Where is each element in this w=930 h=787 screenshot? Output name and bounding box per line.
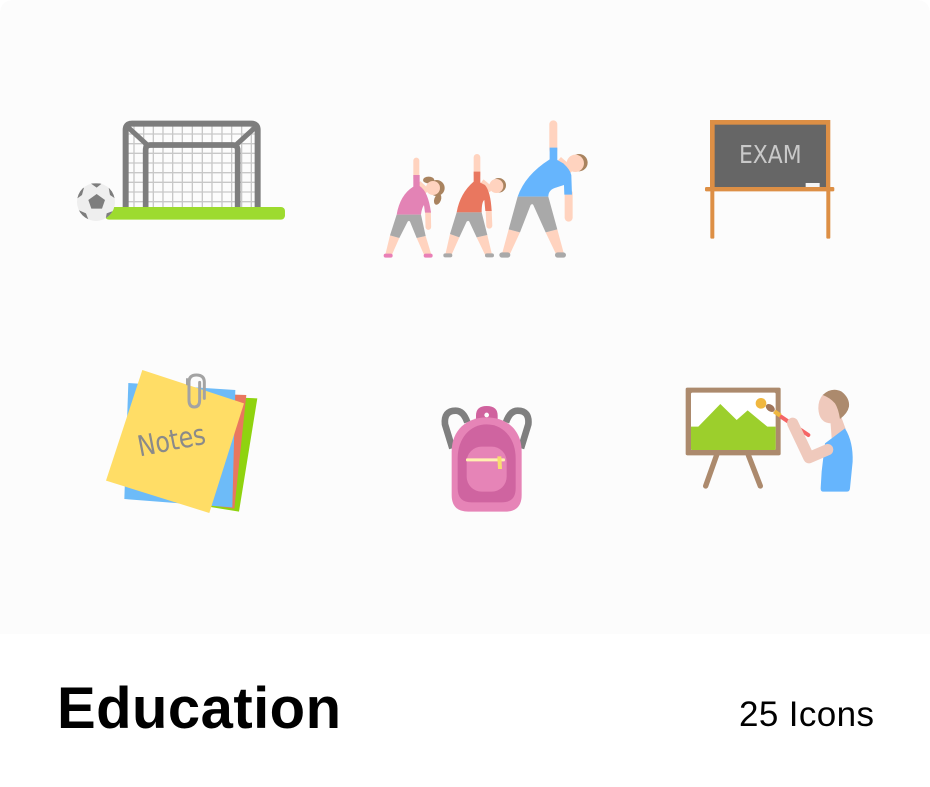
icon: three people stretching (384, 124, 588, 258)
icon count label: 25 Icons (739, 695, 874, 734)
icon: sticky notes with paperclip (106, 370, 257, 513)
icon: exam chalkboard (705, 120, 834, 239)
title: Education (57, 676, 341, 741)
icon: exam chalkboard: EXAM (739, 140, 802, 169)
icon: sticky notes with paperclip: Notes (135, 417, 208, 463)
figure: child (443, 157, 506, 257)
figure: girl (384, 161, 445, 258)
icon: soccer goal (77, 124, 285, 221)
figure: adult (499, 124, 588, 258)
icon: backpack (445, 406, 528, 512)
icon: painter at easel (686, 388, 853, 492)
